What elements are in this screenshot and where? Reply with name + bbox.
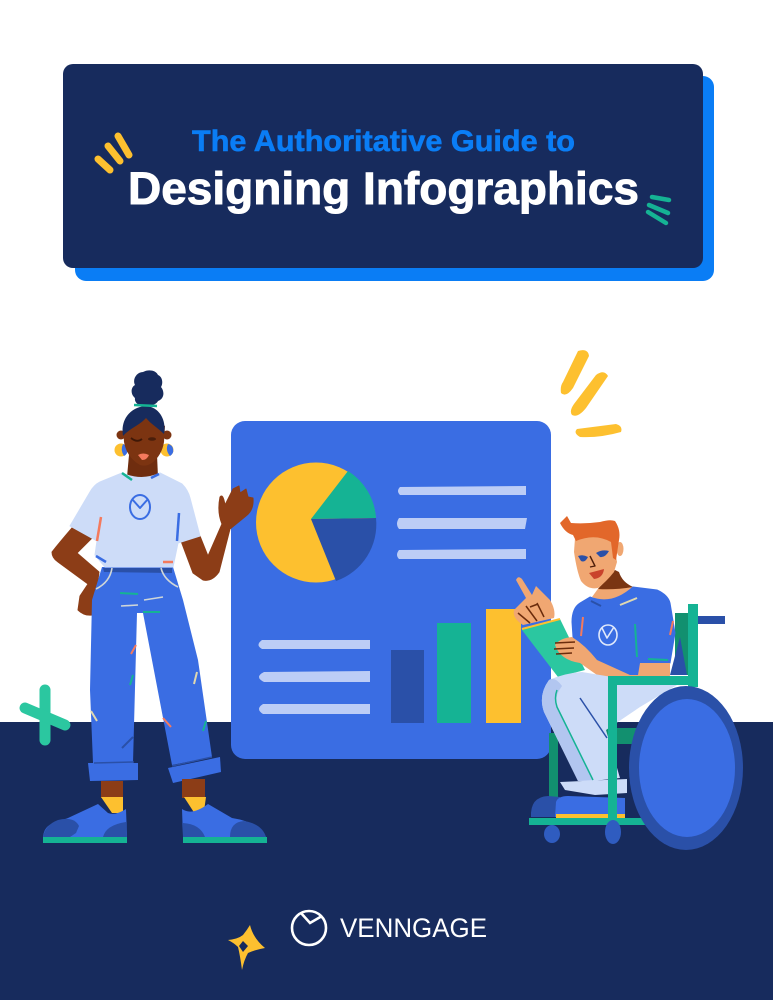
earrings	[114, 444, 174, 456]
wheelchair handle	[698, 616, 725, 624]
man's shoe	[555, 796, 625, 818]
pocket stitching	[96, 568, 178, 606]
waistband	[103, 568, 172, 573]
face	[574, 535, 617, 588]
wheel	[629, 686, 743, 850]
logo wordmark: VENNGAGE	[340, 913, 487, 943]
shirt	[572, 587, 675, 675]
eyes and mouth	[578, 550, 609, 579]
icon: yellow burst marks	[561, 350, 621, 437]
hair	[560, 516, 620, 560]
cuff folds	[94, 757, 212, 766]
hair band	[134, 405, 157, 406]
subtitle: The Authoritative Guide to	[192, 125, 575, 158]
navy floor band	[0, 722, 773, 1000]
left shoe	[43, 804, 127, 843]
pants	[542, 672, 677, 781]
shirt accents	[96, 473, 179, 562]
icon: green accent marks	[648, 197, 669, 223]
ear	[616, 542, 624, 556]
face	[123, 412, 165, 466]
right arm and hand	[181, 486, 253, 580]
back shoe	[531, 796, 560, 817]
pants cuff	[560, 779, 627, 795]
jeans cuffs	[88, 757, 221, 783]
t-shirt	[70, 473, 200, 567]
logo mark	[292, 911, 326, 945]
socks	[101, 797, 206, 814]
jeans confetti marks	[91, 593, 206, 748]
neck	[127, 455, 158, 480]
header banner	[63, 64, 714, 281]
right shoe	[182, 804, 267, 843]
casters	[544, 820, 621, 844]
main title: Designing Infographics	[128, 163, 639, 214]
text lines: lower left	[258, 640, 370, 714]
bar chart	[391, 609, 521, 723]
icon: yellow accent marks	[98, 136, 129, 170]
ankles	[101, 779, 205, 798]
shirt accents	[581, 598, 673, 660]
ears	[116, 430, 172, 440]
wheelchair back and seat	[549, 613, 689, 797]
shirt shade	[670, 637, 687, 675]
wheelchair frame	[529, 604, 698, 825]
finger lines	[554, 642, 575, 654]
figure: man in wheelchair	[514, 516, 743, 850]
icon: yellow sparkle	[228, 925, 265, 970]
icon: green cross	[25, 690, 65, 740]
logo: Venngage	[292, 911, 487, 945]
pants shaded leg	[542, 679, 593, 781]
jeans	[90, 567, 212, 765]
figure: woman presenting	[43, 370, 267, 843]
pie chart	[256, 462, 376, 582]
neck	[592, 586, 633, 601]
hair bun	[132, 370, 163, 406]
facial features	[131, 437, 156, 460]
hair	[123, 406, 165, 436]
shirt logo	[599, 625, 617, 645]
pointing hand	[514, 577, 554, 625]
forearm and lower hand	[555, 637, 670, 698]
left arm	[52, 528, 99, 615]
text lines: upper right	[397, 486, 527, 559]
t-shirt logo	[130, 495, 150, 519]
panel: presentation board	[231, 421, 551, 759]
tablet	[522, 619, 585, 677]
